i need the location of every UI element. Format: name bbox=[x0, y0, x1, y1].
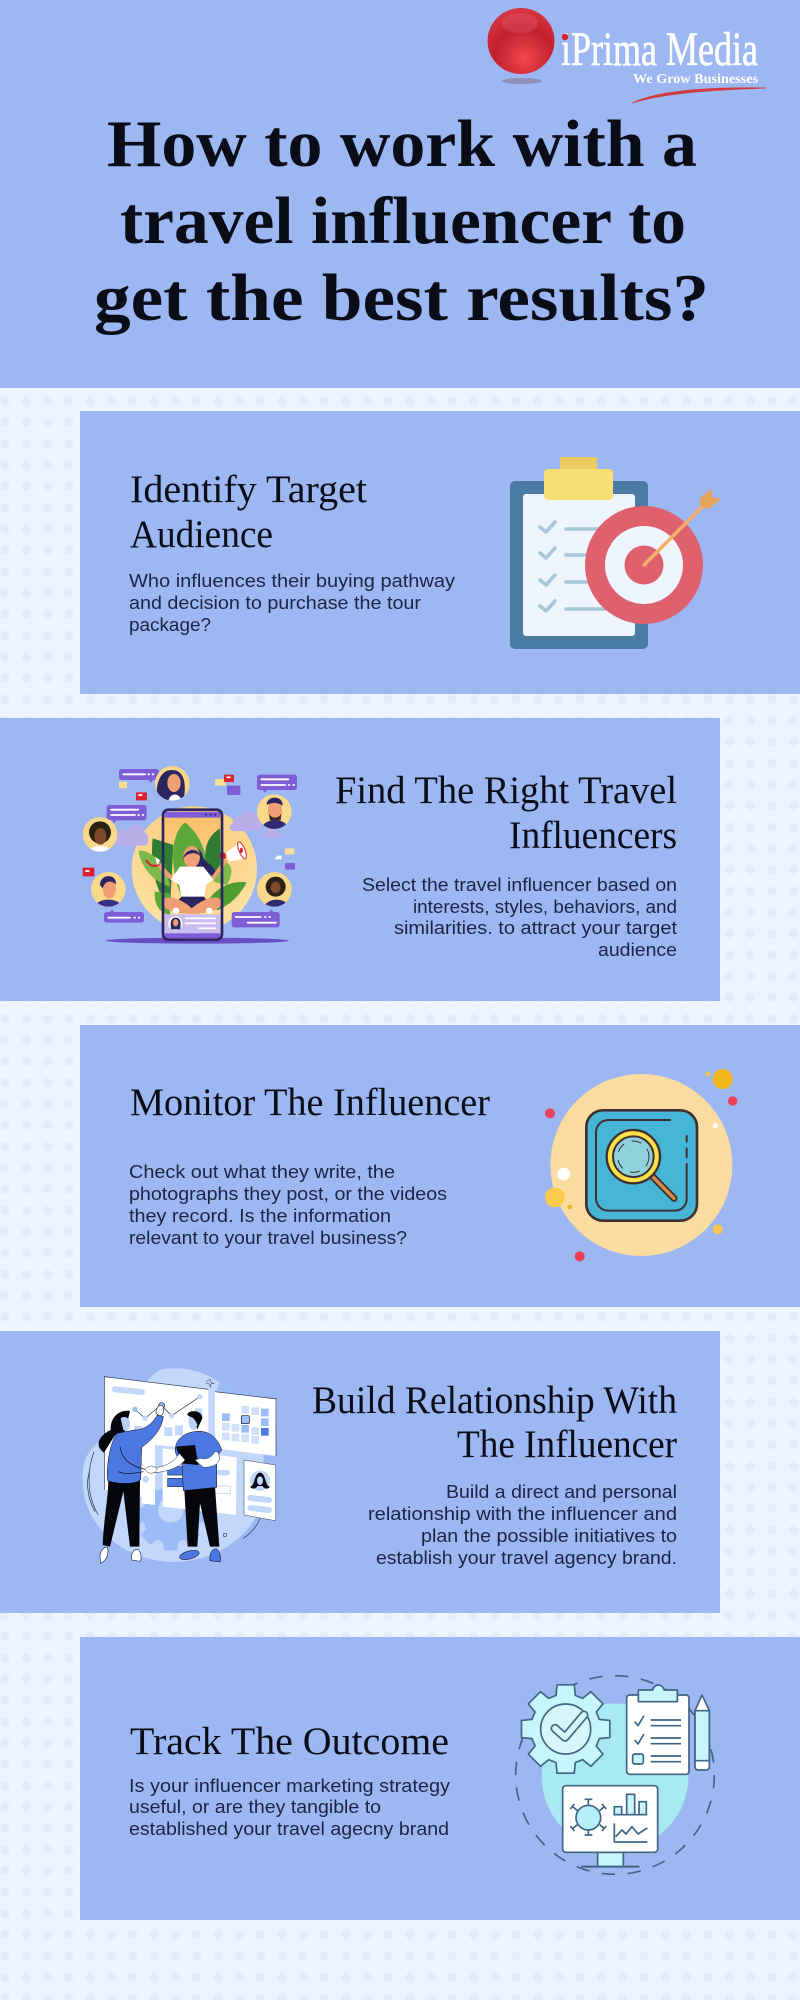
body text: Who influences their buying pathway bbox=[129, 571, 455, 591]
body text: audience bbox=[598, 940, 677, 960]
heading: track the outcome: Track The Outcome bbox=[130, 1720, 449, 1763]
heading: build relationship with the influencer bbox=[312, 1379, 677, 1466]
heading: find the right travel influencers: Find The Right Travel bbox=[335, 769, 677, 812]
title: travel influencer to bbox=[120, 184, 686, 258]
heading: build relationship with the influencer: Build Relationship With bbox=[312, 1379, 677, 1422]
logo tagline: We Grow Businesses bbox=[633, 71, 758, 86]
body text: interests, styles, behaviors, and bbox=[413, 897, 677, 917]
followers avatars bbox=[155, 766, 190, 801]
heading: find the right travel influencers bbox=[335, 769, 677, 857]
body text: Select the travel influencer based on bbox=[362, 875, 677, 895]
body text bbox=[368, 1482, 677, 1568]
body text: plan the possible initiatives to bbox=[421, 1526, 677, 1546]
body text bbox=[129, 1776, 450, 1839]
body text: Build a direct and personal bbox=[446, 1482, 677, 1502]
title: get the best results? bbox=[94, 261, 709, 335]
body text: establish your travel agency brand. bbox=[376, 1548, 677, 1568]
body text: useful, or are they tangible to bbox=[129, 1797, 381, 1817]
body text bbox=[129, 1162, 447, 1248]
body text bbox=[362, 875, 677, 960]
body text: similarities. to attract your target bbox=[394, 918, 677, 938]
body text: Is your influencer marketing strategy bbox=[129, 1776, 450, 1796]
heading: identify target audience bbox=[130, 468, 367, 556]
panel: find the right travel influencers bbox=[0, 718, 720, 1001]
body text: relevant to your travel business? bbox=[129, 1228, 407, 1248]
body text: they record. Is the information bbox=[129, 1206, 391, 1226]
icon: gear, checklist and monitor bbox=[516, 1676, 714, 1874]
logo: iPrima Media bbox=[488, 8, 766, 103]
header band bbox=[0, 0, 800, 388]
icon: clipboard with target bbox=[510, 457, 720, 649]
title bbox=[94, 107, 709, 335]
body text: established your travel agecny brand bbox=[129, 1819, 449, 1839]
heading: identify target audience: Identify Target bbox=[130, 468, 367, 511]
body text: package? bbox=[129, 615, 211, 635]
panel: build relationship with the influencer bbox=[0, 1331, 720, 1613]
body text: and decision to purchase the tour bbox=[129, 593, 421, 613]
body text bbox=[129, 571, 455, 635]
title: How to work with a bbox=[107, 107, 697, 181]
woman bbox=[99, 1411, 130, 1453]
heading: build relationship with the influencer: The Influencer bbox=[457, 1423, 677, 1466]
logo red ball bbox=[488, 8, 554, 84]
icon: influencer on phone with followers bbox=[83, 766, 297, 944]
body text: Check out what they write, the bbox=[129, 1162, 395, 1182]
heading: identify target audience: Audience bbox=[130, 513, 273, 556]
heading: find the right travel influencers: Influencers bbox=[509, 814, 677, 857]
logo swoosh bbox=[632, 88, 766, 103]
body text: relationship with the influencer and bbox=[368, 1504, 677, 1524]
panel: track the outcome bbox=[80, 1637, 800, 1920]
panel: identify target audience bbox=[80, 411, 800, 694]
illustration: two people shaking hands bbox=[83, 1368, 277, 1563]
icon: magnifying glass in circle bbox=[545, 1069, 737, 1261]
body text: photographs they post, or the videos bbox=[129, 1184, 447, 1204]
man bbox=[184, 1487, 219, 1547]
heading: monitor the influencer: Monitor The Influencer bbox=[130, 1081, 490, 1124]
panel: monitor the influencer bbox=[80, 1025, 800, 1307]
